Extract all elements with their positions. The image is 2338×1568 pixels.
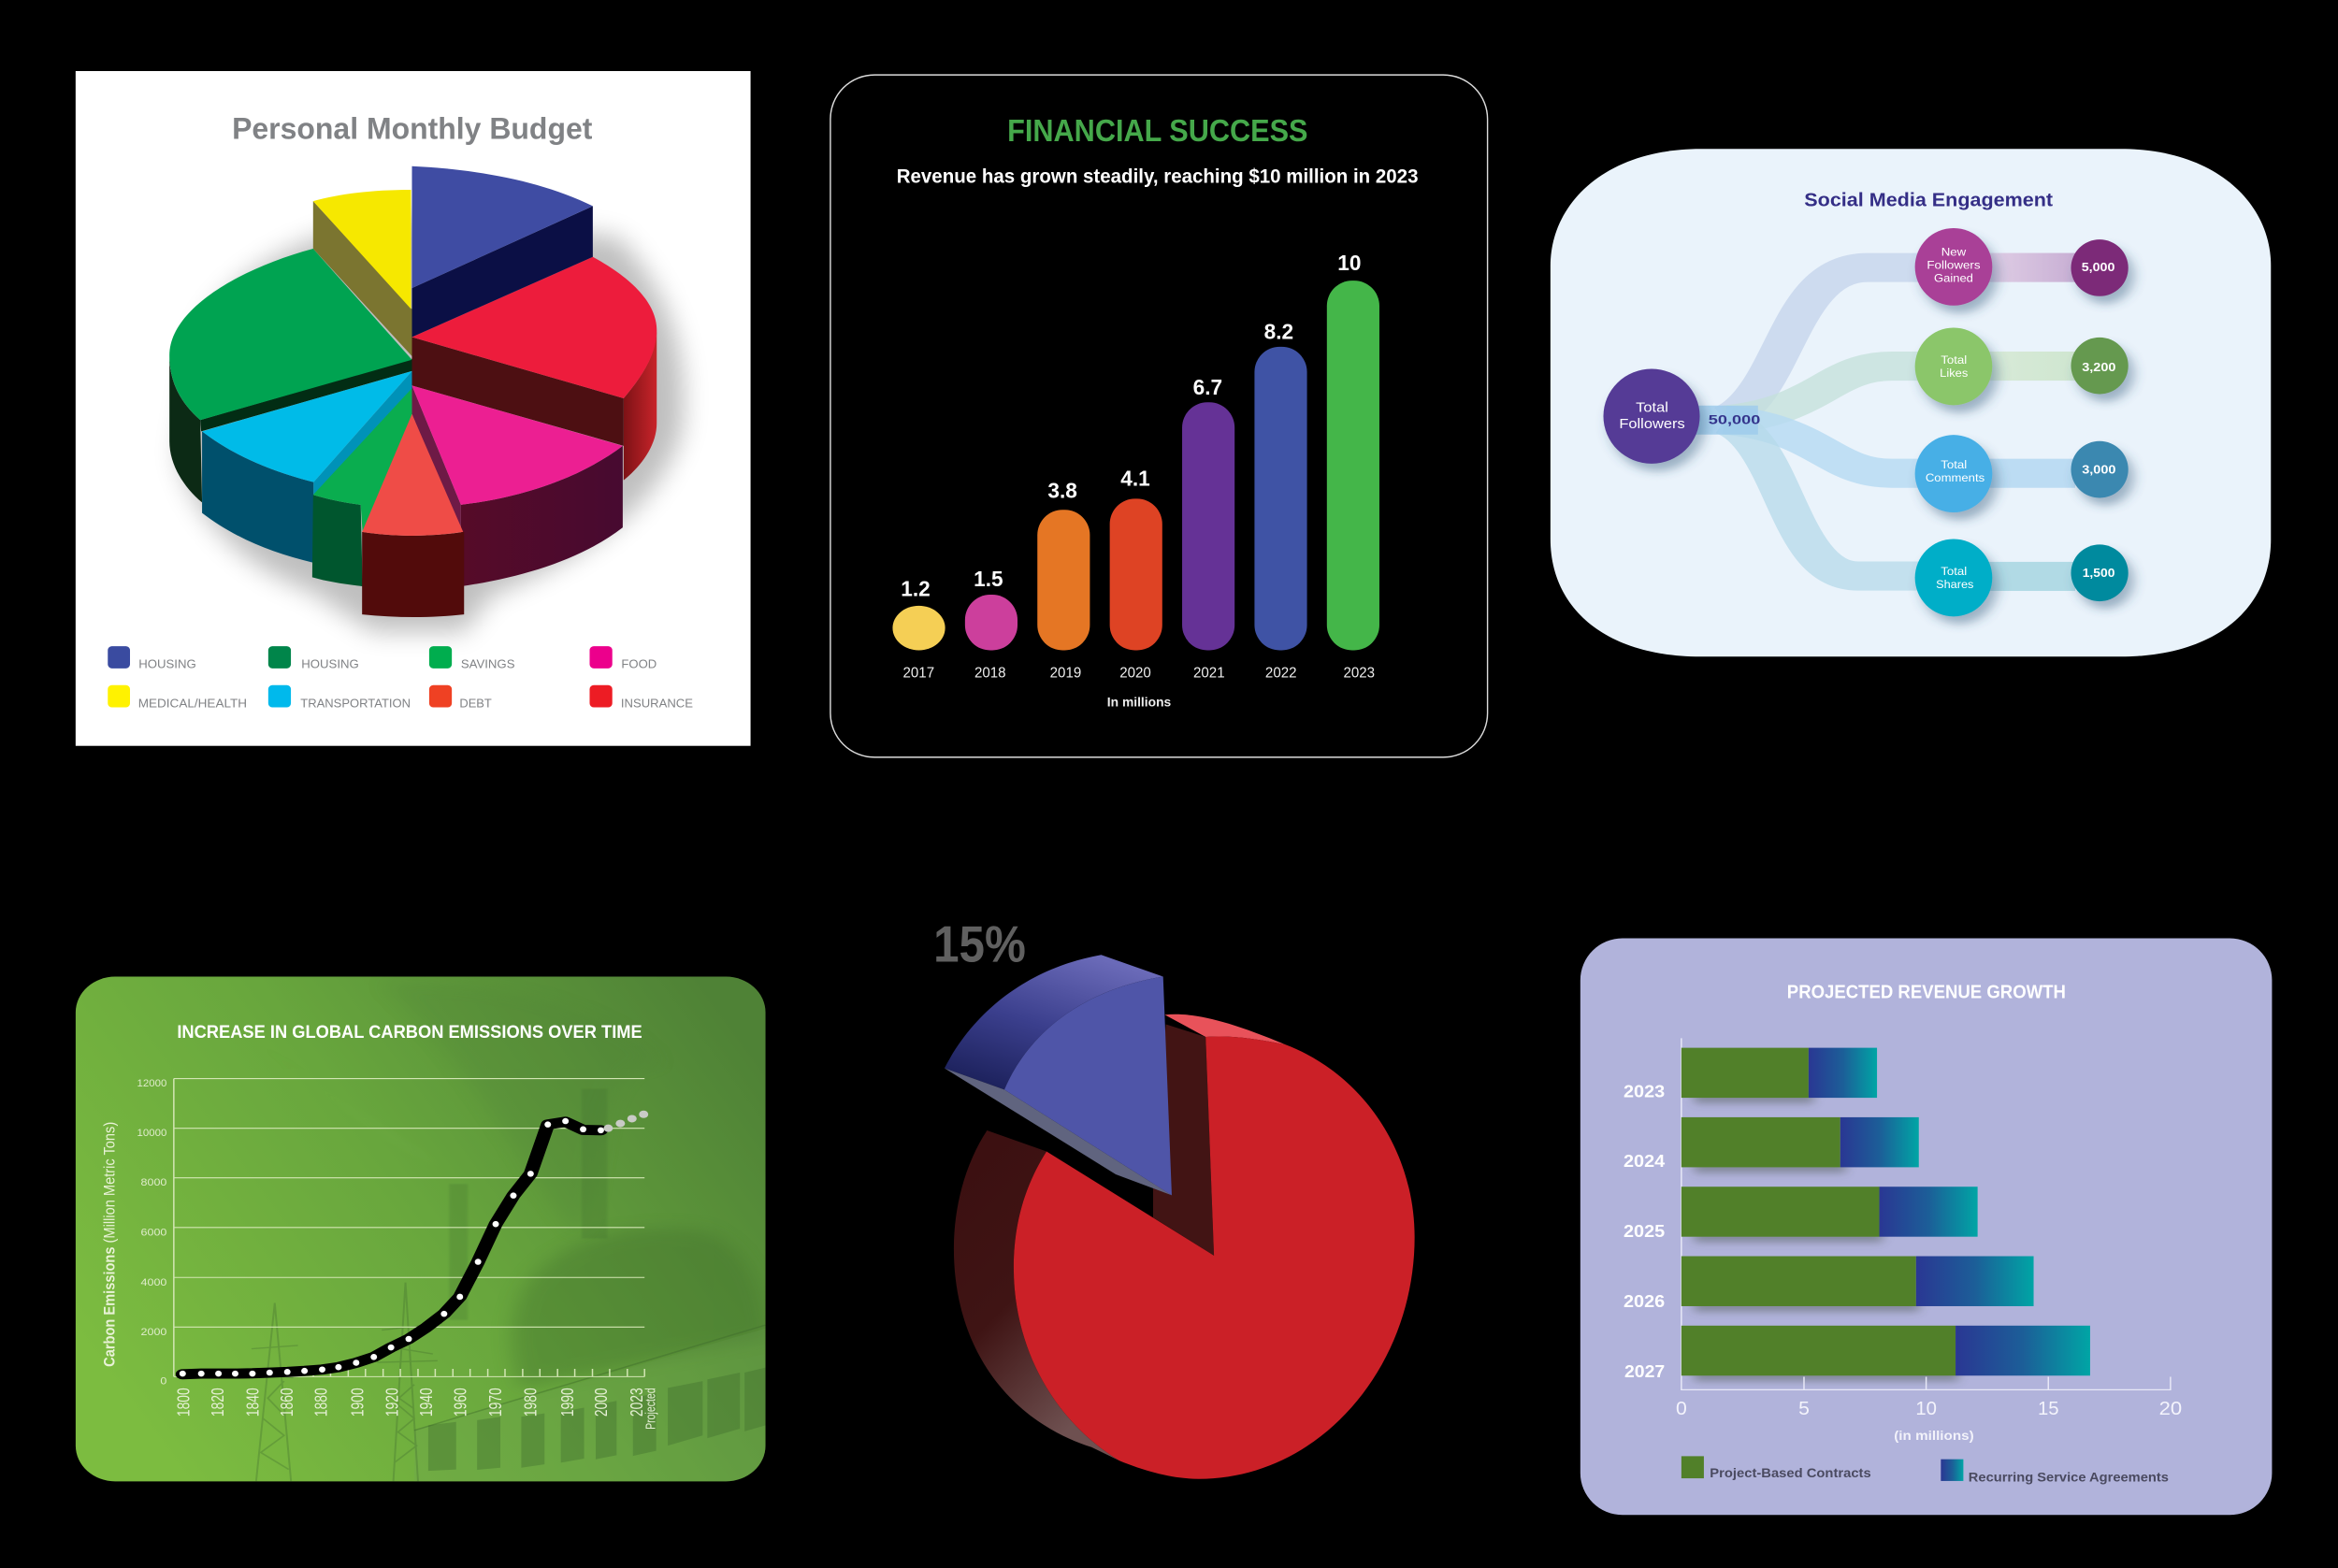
bar 2018	[965, 595, 1017, 650]
pie slice: savings	[312, 388, 411, 586]
subheading: Revenue has grown steadily, reaching $10 million in 2023	[897, 165, 1419, 188]
pie slice: insurance	[411, 257, 657, 481]
bar 2017	[892, 606, 945, 650]
y axis title: Carbon Emissions (Million Metric Tons)	[102, 1122, 119, 1367]
x axis labels: 5	[1798, 1398, 1810, 1418]
value: 1,500	[2071, 544, 2129, 601]
value: 50,000: 50,000	[1709, 412, 1760, 427]
value labels: 6.7	[1193, 375, 1222, 399]
x axis labels: 2000	[591, 1388, 611, 1417]
pie top: red	[1014, 1036, 1415, 1479]
value labels: 4.1	[1120, 466, 1150, 491]
x axis labels: 1900	[347, 1388, 368, 1417]
y axis labels: 4000	[141, 1276, 166, 1287]
legend item: housing blue: HOUSING	[138, 656, 196, 670]
year labels: 2023	[1624, 1082, 1665, 1101]
x axis labels: 1990	[557, 1388, 578, 1417]
node: total comments	[1915, 435, 1992, 512]
node: new followers gained: Gained	[1934, 272, 1973, 285]
panel: carbon emissions	[76, 977, 768, 1481]
year labels: 2024	[1624, 1152, 1666, 1172]
value labels: 3.8	[1047, 478, 1077, 503]
bar 2023	[1327, 281, 1379, 650]
x axis labels	[1676, 1398, 2182, 1418]
year labels: 2021	[1193, 665, 1225, 682]
x axis labels: Projected	[643, 1388, 658, 1430]
bar 2022	[1254, 347, 1307, 650]
pie slice: transportation	[202, 371, 411, 563]
year labels: 2026	[1624, 1292, 1665, 1311]
year labels	[1624, 1082, 1666, 1381]
x axis labels: 1860	[277, 1388, 297, 1417]
x axis labels: 1920	[382, 1388, 402, 1417]
x axis labels: 1980	[520, 1388, 541, 1417]
node: total followers	[1603, 368, 1700, 464]
legend item: insurance	[589, 685, 693, 711]
year labels: 2027	[1624, 1362, 1665, 1381]
x axis labels: 10	[1915, 1398, 1937, 1418]
pie rim highlight	[1165, 1014, 1285, 1044]
y axis labels: 0	[160, 1375, 166, 1387]
legend item: housing green	[268, 646, 359, 670]
node: total shares: Shares	[1936, 579, 1973, 591]
pie slice: housing blue	[411, 166, 593, 338]
value: 3,200: 3,200	[2082, 361, 2115, 374]
value: 3,000	[2071, 441, 2129, 497]
legend: recurring service agreements	[1941, 1460, 2169, 1485]
node: total shares: Total	[1941, 566, 1967, 578]
value labels: 1.2	[901, 576, 931, 601]
node: total shares	[1915, 539, 1992, 616]
x axis labels: 1820	[208, 1388, 228, 1417]
value: 3,200	[2071, 338, 2129, 394]
x axis labels: 1970	[485, 1388, 506, 1417]
bar 2023	[1681, 1048, 1877, 1098]
x axis labels: 2023	[627, 1388, 647, 1417]
axes	[1681, 1038, 2171, 1389]
node: total followers: Followers	[1619, 415, 1685, 431]
value labels	[901, 250, 1361, 601]
pie inner wall	[1153, 1025, 1214, 1256]
axis unit: (in millions)	[1894, 1429, 1974, 1443]
value labels: 1.5	[974, 567, 1003, 591]
legend item: housing green: HOUSING	[301, 656, 359, 670]
year labels: 2022	[1265, 665, 1297, 682]
legend: recurring service agreements: Recurring Service Agreements	[1969, 1471, 2169, 1485]
heading: increase in global carbon emissions over time: INCREASE IN GLOBAL CARBON EMISSIONS OVER TIME	[177, 1021, 642, 1042]
legend: project-based contracts	[1681, 1456, 1871, 1480]
panel: social media engagement	[1551, 149, 2271, 656]
y axis labels: 2000	[141, 1326, 166, 1338]
panel: 3D pie 15%	[933, 915, 1415, 1479]
y axis labels: 10000	[137, 1127, 166, 1139]
heading: personal monthly budget: Personal Monthly Budget	[232, 112, 593, 146]
year labels: 2017	[903, 665, 934, 682]
projected points	[603, 1111, 648, 1132]
node: new followers gained	[1915, 228, 1992, 306]
legend item: transportation	[268, 685, 411, 711]
exploded slice: blue 15%	[945, 955, 1172, 1195]
legend item: insurance: INSURANCE	[621, 697, 693, 711]
node: total comments: Comments	[1926, 472, 1984, 484]
bar 2019	[1037, 510, 1090, 650]
legend item: debt	[429, 685, 492, 711]
heading: financial success: FINANCIAL SUCCESS	[1007, 112, 1308, 148]
grid and axes	[174, 1079, 644, 1376]
x axis labels: 1940	[416, 1388, 436, 1417]
bar 2024	[1681, 1117, 1919, 1167]
node: total comments: Total	[1941, 459, 1967, 471]
x axis labels: 0	[1676, 1398, 1687, 1418]
year labels: 2020	[1119, 665, 1151, 682]
heading: projected revenue growth: PROJECTED REVENUE GROWTH	[1787, 981, 2066, 1002]
x axis labels: 1800	[173, 1388, 194, 1417]
panel: personal monthly budget	[76, 71, 751, 746]
y axis labels: 12000	[137, 1077, 166, 1088]
x axis labels: 1840	[242, 1388, 263, 1417]
pie slice: food	[411, 385, 623, 586]
legend item: savings: SAVINGS	[461, 656, 515, 670]
node: total likes: Likes	[1940, 367, 1968, 380]
value labels: 10	[1337, 250, 1361, 275]
year labels: 2025	[1624, 1222, 1665, 1242]
value: 5,000: 5,000	[2082, 261, 2114, 274]
legend item: food	[589, 646, 657, 670]
year labels: 2019	[1050, 665, 1081, 682]
pie shadow	[179, 215, 684, 632]
legend item: medical/health: MEDICAL/HEALTH	[138, 697, 247, 711]
x axis labels: 1960	[451, 1388, 470, 1417]
bar 2020	[1110, 498, 1162, 650]
legend item: savings	[429, 646, 515, 670]
value: 1,500: 1,500	[2083, 567, 2114, 580]
emissions line	[182, 1122, 600, 1374]
legend item: debt: DEBT	[459, 697, 492, 711]
bar 2026	[1681, 1257, 2034, 1306]
3D pie chart	[169, 166, 657, 617]
bar 2025	[1681, 1187, 1978, 1237]
label: 15%: 15%	[933, 915, 1026, 972]
pie body	[954, 1014, 1415, 1479]
unit note: In millions	[1107, 695, 1171, 709]
x axis labels: 15	[2038, 1398, 2059, 1418]
bar chart: revenue	[892, 250, 1379, 709]
legend item: housing blue	[108, 646, 196, 670]
node: new followers gained: Followers	[1927, 260, 1981, 272]
bar 2027	[1681, 1326, 2090, 1375]
legend item: medical/health	[108, 685, 247, 711]
sankey flows	[1696, 253, 2075, 591]
year labels	[903, 665, 1375, 682]
x axis labels: 20	[2159, 1398, 2182, 1418]
node: new followers gained: New	[1941, 247, 1967, 259]
node: total followers: Total	[1636, 398, 1668, 415]
y axis labels	[137, 1077, 166, 1387]
value: 5,000	[2071, 239, 2129, 296]
y axis labels: 6000	[141, 1227, 166, 1238]
background photo: smoke, towers and factory	[236, 1088, 765, 1481]
bar shadows	[1695, 1094, 1958, 1380]
heading: social media engagement: Social Media Engagement	[1804, 190, 2053, 211]
pie slice: debt	[362, 414, 464, 617]
panel: projected revenue growth	[1580, 938, 2272, 1515]
legend item: transportation: TRANSPORTATION	[300, 697, 411, 711]
legend: project-based contracts: Project-Based Contracts	[1710, 1466, 1871, 1480]
legend item: food: FOOD	[621, 656, 657, 670]
data points	[180, 1118, 604, 1376]
bar 2021	[1182, 402, 1234, 650]
legend	[108, 646, 693, 711]
value labels: 8.2	[1264, 319, 1293, 344]
y axis labels: 8000	[141, 1176, 166, 1188]
year labels: 2023	[1343, 665, 1375, 682]
stacked bar chart	[1624, 1038, 2182, 1443]
year labels: 2018	[974, 665, 1006, 682]
pie slice: housing green	[169, 249, 411, 502]
node: total likes: Total	[1941, 354, 1967, 367]
line chart: emissions	[102, 1077, 658, 1430]
panel: financial success	[830, 75, 1488, 757]
pie slice: medical/health	[313, 190, 411, 356]
x axis labels: 1880	[310, 1388, 331, 1417]
pie side: outer dark	[954, 1130, 1119, 1460]
value: 3,000: 3,000	[2082, 464, 2115, 477]
node: total likes	[1915, 327, 1992, 405]
x axis labels	[173, 1388, 658, 1430]
